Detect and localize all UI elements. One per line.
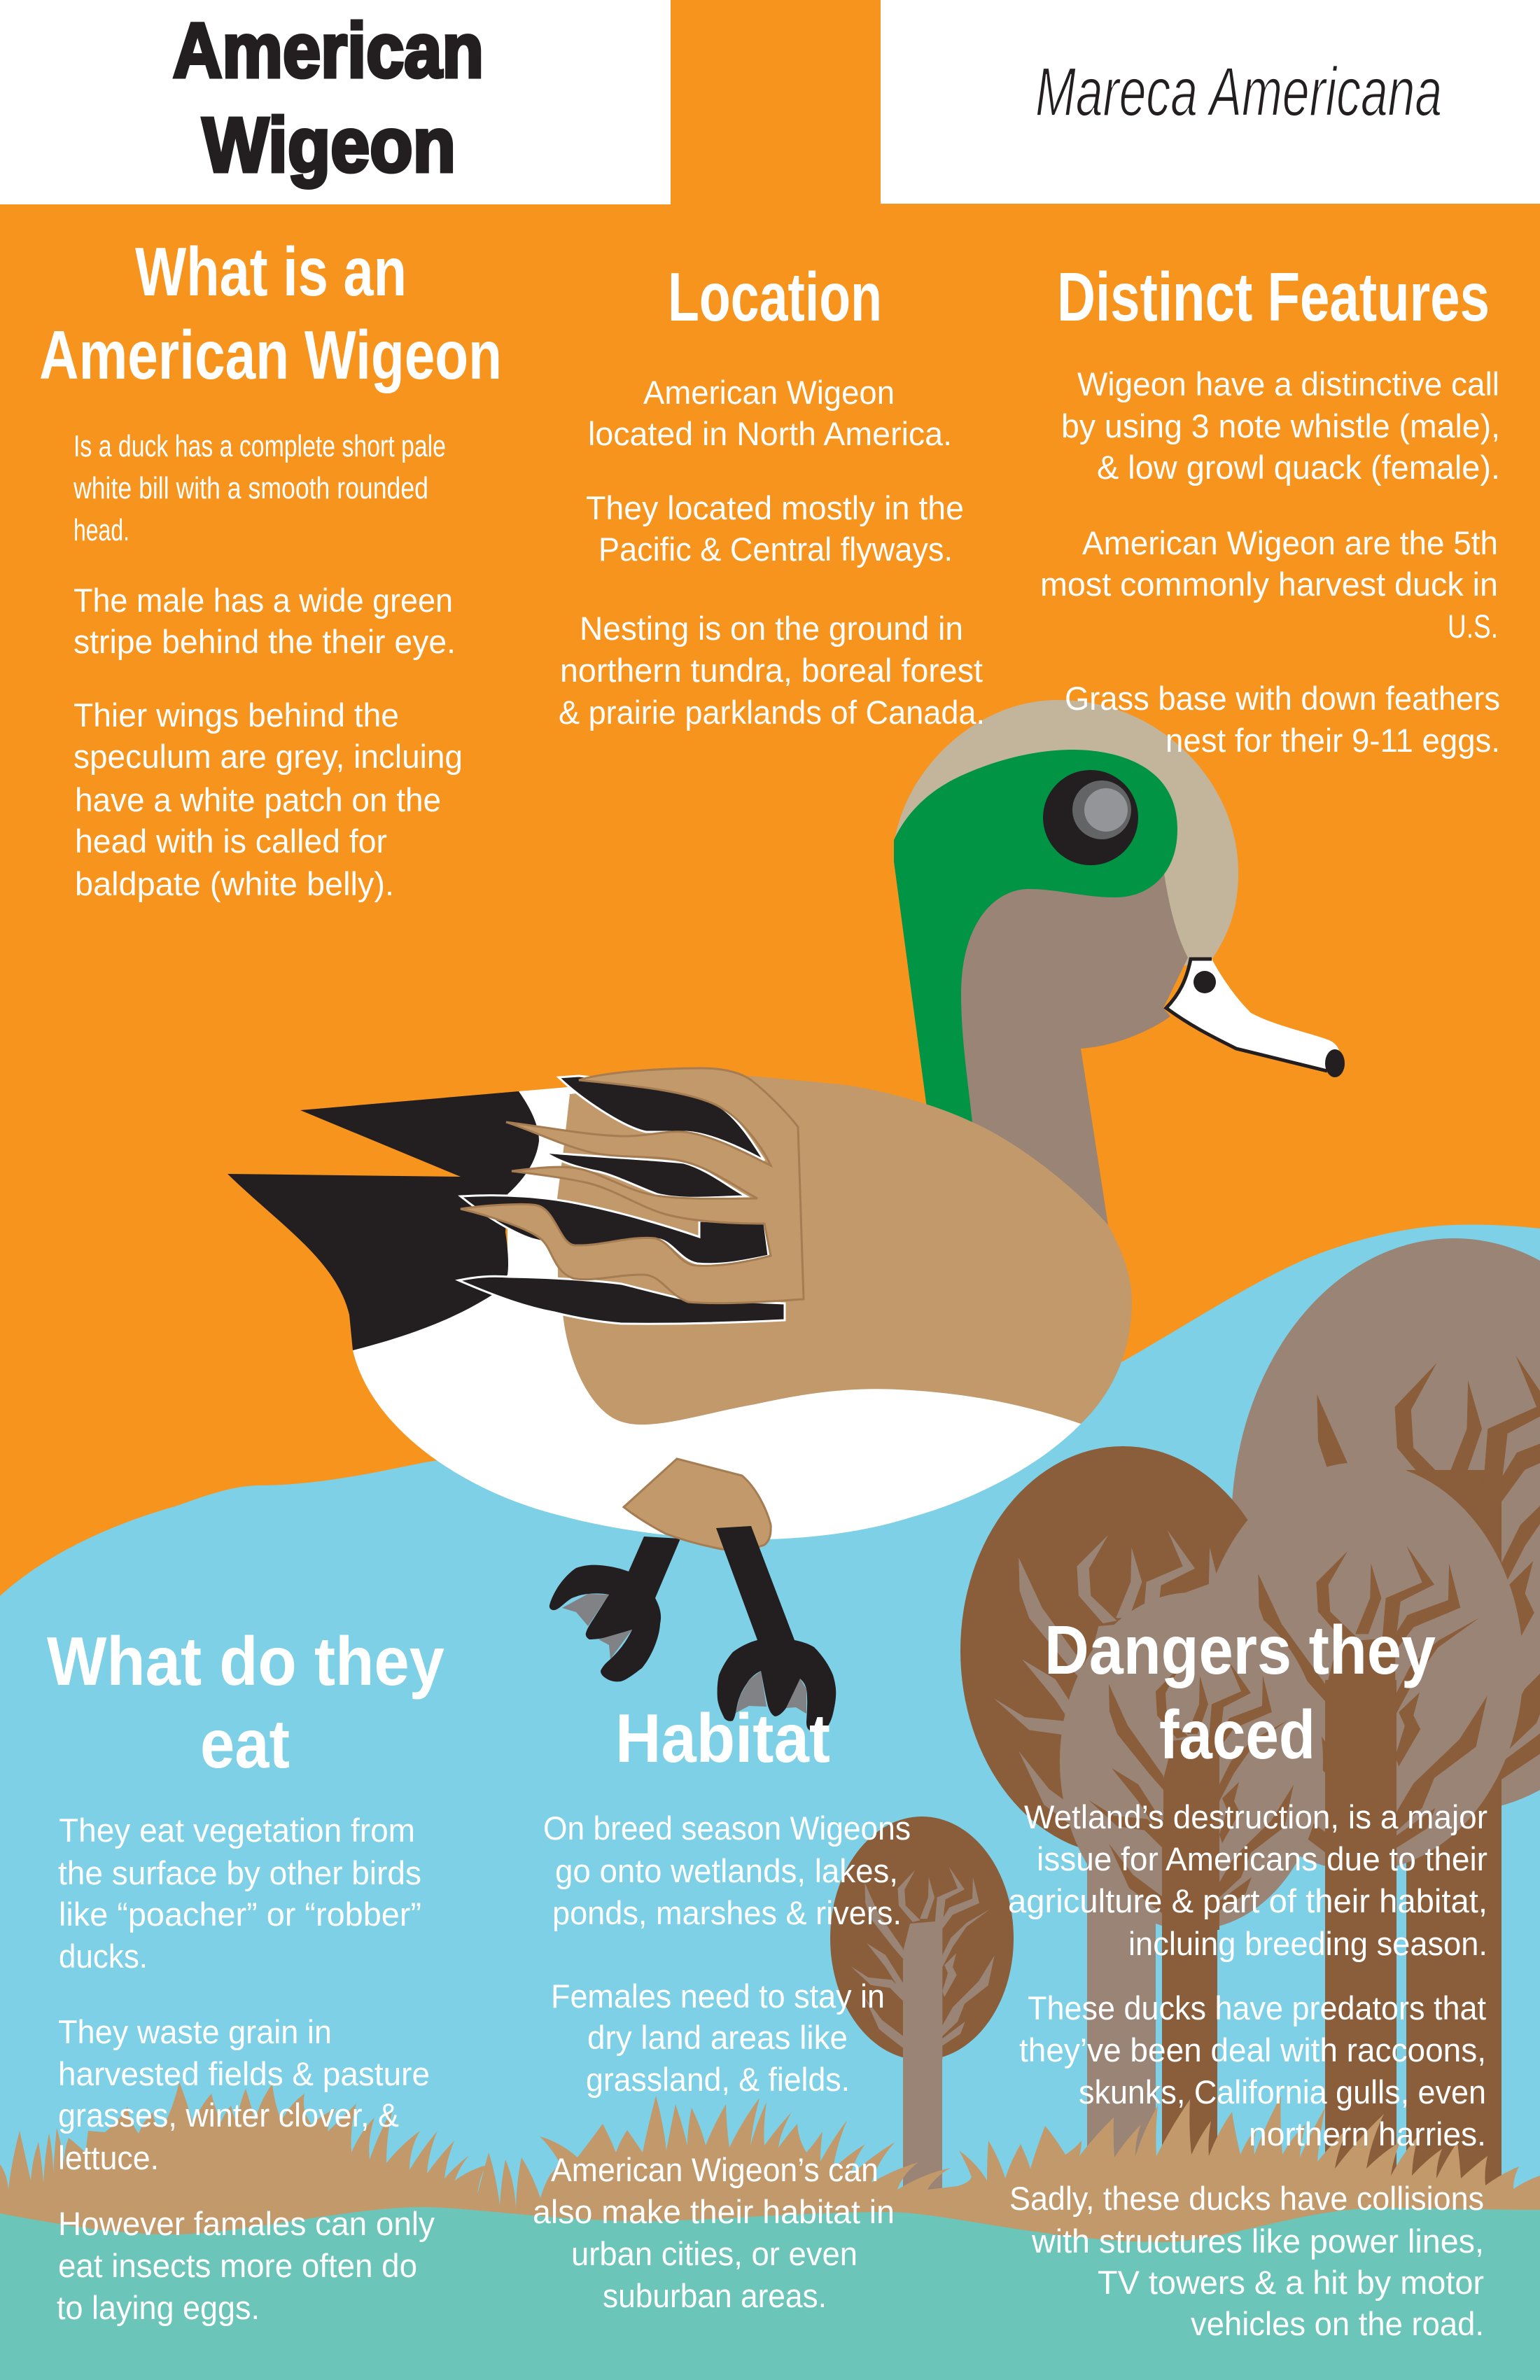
duck front leg and foot: [716, 1526, 836, 1730]
duck neck and face: [952, 858, 1188, 1225]
text block: Pacific & Central flyways.: [598, 531, 953, 568]
text block: eat insects more often do: [58, 2247, 417, 2284]
text block: Wetland’s destruction, is a major: [1024, 1798, 1488, 1835]
text block: northern tundra, boreal forest: [560, 652, 983, 689]
panel: habitat: [533, 1700, 911, 2314]
text block: Sadly, these ducks have collisions: [1009, 2180, 1484, 2217]
panel: location: [559, 258, 985, 731]
text block: However famales can only: [58, 2205, 435, 2242]
text block: American Wigeon’s can: [551, 2151, 878, 2188]
text block: Wigeon have a distinctive call: [1077, 365, 1499, 402]
text block: ponds, marshes & rivers.: [552, 1894, 902, 1931]
heading: What do they: [47, 1623, 444, 1700]
heading: [1044, 1611, 1436, 1773]
text block: Is a duck has a complete short pale: [74, 429, 446, 463]
text block: Thier wings behind the: [74, 696, 399, 734]
text block: [1008, 1798, 1488, 1962]
tree: brown crown tree: [960, 1446, 1285, 2198]
text block: located in North America.: [588, 415, 952, 452]
text block: the surface by other birds: [58, 1854, 421, 1891]
text block: incluing breeding season.: [1128, 1925, 1488, 1962]
text block: by using 3 note whistle (male),: [1061, 407, 1500, 444]
text block: harvested fields & pasture: [58, 2055, 430, 2092]
tree: small tree: [830, 1816, 1014, 2198]
text block: American Wigeon are the 5th: [1082, 524, 1498, 561]
text block: [533, 2151, 895, 2314]
text block: Females need to stay in: [551, 1977, 885, 2015]
text block: to laying eggs.: [57, 2289, 260, 2326]
text block: also make their habitat in: [533, 2193, 895, 2230]
text block: [58, 1812, 421, 1975]
text block: agriculture & part of their habitat,: [1008, 1882, 1488, 1919]
text block: grasses, winter clover, &: [58, 2096, 399, 2134]
duck back leg and foot: [550, 1536, 680, 1681]
text block: [74, 582, 456, 660]
text block: & prairie parklands of Canada.: [559, 694, 985, 731]
text block: They waste grain in: [58, 2013, 332, 2050]
tree: grey crown left: [1060, 1592, 1323, 2198]
duck eye: [1043, 770, 1138, 865]
text block: U.S.: [1448, 608, 1498, 645]
text block: skunks, California gulls, even: [1079, 2073, 1486, 2110]
text block: dry land areas like: [587, 2019, 848, 2056]
text block: They eat vegetation from: [59, 1812, 415, 1849]
text block: [559, 610, 985, 731]
text block: These ducks have predators that: [1028, 1989, 1486, 2026]
heading: Location: [668, 258, 882, 335]
text block: American Wigeon: [643, 374, 895, 411]
blue wave background: [0, 1224, 1540, 2380]
text block: [73, 429, 446, 547]
text block: They located mostly in the: [586, 489, 964, 526]
text block: Grass base with down feathers: [1065, 680, 1500, 717]
text block: go onto wetlands, lakes,: [555, 1852, 898, 1889]
text block: issue for Americans due to their: [1037, 1840, 1488, 1877]
duck wing: [461, 1068, 804, 1303]
text block: stripe behind the their eye.: [74, 623, 456, 660]
text block: [1019, 1989, 1486, 2152]
heading: Habitat: [615, 1700, 830, 1777]
text block: northern harries.: [1249, 2115, 1486, 2152]
duck white belly and back: [353, 1087, 1081, 1539]
text block: [1040, 524, 1498, 645]
text block: most commonly harvest duck in: [1040, 566, 1498, 603]
duck black tail: [227, 1091, 539, 1350]
text block: [1009, 2180, 1484, 2342]
duck head cream: [895, 700, 1238, 966]
text block: grassland, & fields.: [586, 2061, 850, 2098]
text block: [57, 2205, 435, 2326]
text block: have a white patch on the: [75, 781, 441, 818]
title text: American: [173, 8, 484, 94]
text block: On breed season Wigeons: [543, 1809, 911, 1847]
heading: Dangers they: [1044, 1611, 1436, 1688]
text block: & low growl quack (female).: [1097, 449, 1500, 486]
text block: nest for their 9-11 eggs.: [1166, 722, 1500, 759]
duck green stripe: [894, 750, 1177, 1122]
duck illustration: [227, 700, 1345, 1730]
text block: with structures like power lines,: [1031, 2222, 1484, 2260]
text block: vehicles on the road.: [1191, 2305, 1484, 2342]
heading: What is an: [135, 233, 407, 310]
duck bill: [1166, 959, 1345, 1077]
heading: [39, 233, 502, 393]
text block: [1065, 680, 1500, 759]
text block: [588, 374, 952, 452]
text block: speculum are grey, incluing: [74, 738, 463, 775]
text block: they’ve been deal with raccoons,: [1019, 2031, 1486, 2068]
text block: [543, 1809, 911, 1931]
duck black feathers: [458, 1076, 785, 1324]
text block: [58, 2013, 430, 2176]
text block: baldpate (white belly).: [75, 865, 394, 902]
text block: white bill with a smooth rounded: [73, 471, 428, 505]
panel: what is an American Wigeon: [39, 233, 502, 902]
text block: [586, 489, 964, 568]
heading: eat: [200, 1705, 290, 1782]
heading: faced: [1159, 1696, 1315, 1773]
tree: large back tree: [1231, 1238, 1540, 2198]
text block: TV towers & a hit by motor: [1098, 2264, 1484, 2301]
text block: lettuce.: [58, 2139, 159, 2176]
text block: [1061, 365, 1500, 486]
heading: American Wigeon: [39, 316, 502, 393]
text block: head with is called for: [75, 822, 387, 860]
duck tan body: [557, 1076, 1132, 1424]
panel: dangers they faced: [1008, 1611, 1488, 2342]
title text: Wigeon: [202, 102, 456, 188]
teal foreground: [0, 2207, 1540, 2380]
text block: The male has a wide green: [74, 582, 453, 619]
scientific name panel: [881, 0, 1540, 204]
panel: distinct features: [1040, 258, 1500, 759]
heading: [47, 1623, 444, 1782]
panel: what do they eat: [47, 1623, 444, 2326]
duck thigh: [624, 1459, 771, 1550]
text block: Nesting is on the ground in: [580, 610, 963, 647]
text block: [551, 1977, 885, 2098]
grass ground: [0, 2082, 1540, 2254]
text block: head.: [74, 513, 130, 547]
tree: grey crown right: [1198, 1462, 1523, 2198]
text block: urban cities, or even: [571, 2235, 858, 2272]
title text: [173, 8, 484, 188]
text block: suburban areas.: [603, 2277, 827, 2314]
text block: [74, 696, 463, 902]
title panel: American Wigeon: [0, 0, 671, 204]
text block: ducks.: [59, 1938, 148, 1975]
text block: like “poacher” or “robber”: [59, 1896, 421, 1933]
